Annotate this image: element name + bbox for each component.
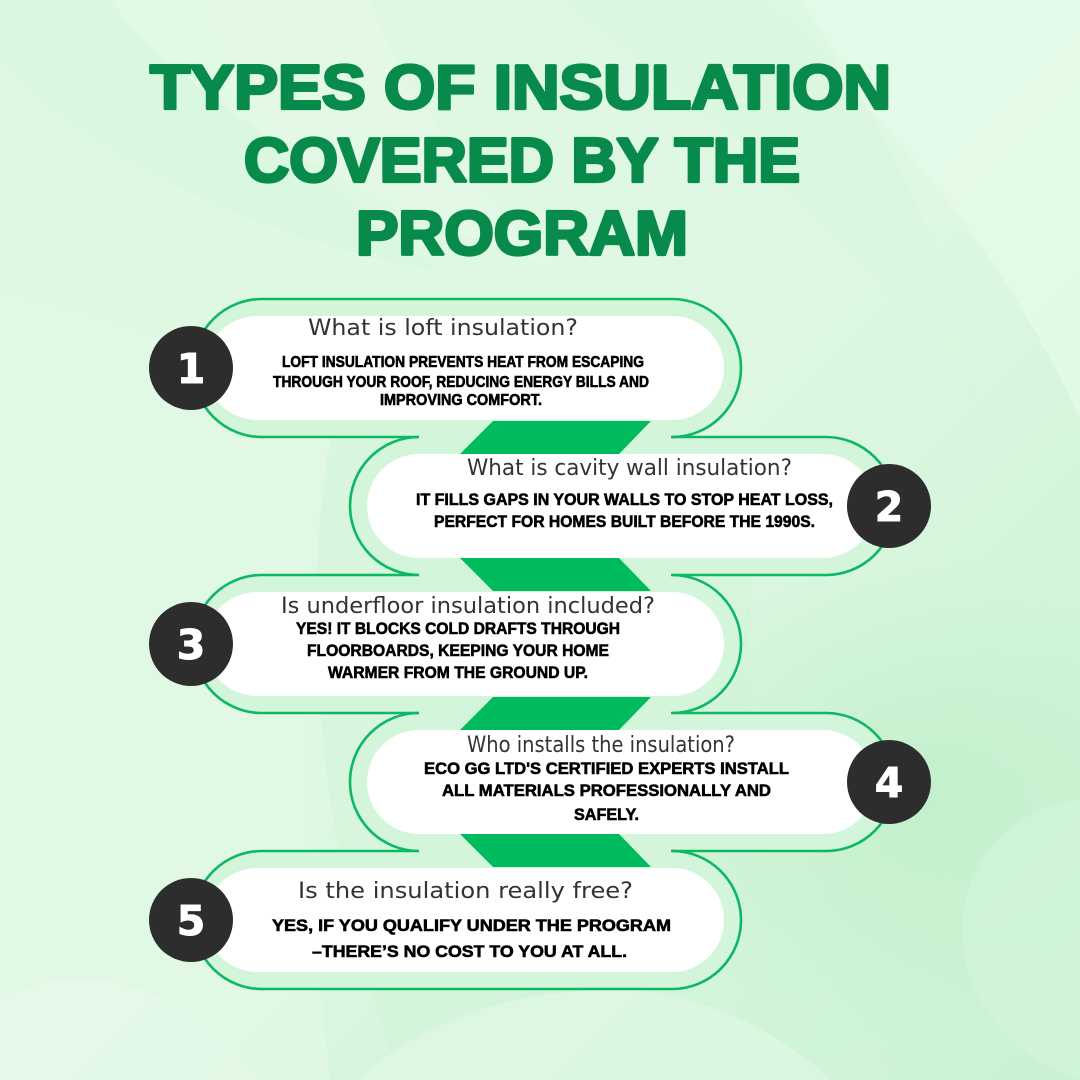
text: step 5 description: –THERE’S NO COST TO YOU AT ALL. <box>312 942 627 961</box>
icon: number 5 badge <box>149 878 233 962</box>
panel: step 2 cavity wall insulation <box>367 454 931 558</box>
icon: number 3 badge <box>149 602 233 686</box>
heading: step 1: What is loft insulation? <box>308 315 578 341</box>
icon: number 3 badge: 3 <box>177 621 205 669</box>
title: TYPES OF INSULATION <box>150 54 891 122</box>
heading: step 5: Is the insulation really free? <box>298 878 633 904</box>
title: COVERED BY THE <box>244 126 800 196</box>
icon: number 2 badge: 2 <box>875 483 903 531</box>
ribbon outline <box>193 299 895 989</box>
green connectors between steps <box>460 421 651 867</box>
text: step 2 description: PERFECT FOR HOMES BUILT BEFORE THE 1990S. <box>434 512 815 531</box>
panel: step 4 who installs <box>367 730 931 834</box>
title <box>150 54 891 268</box>
text: step 4 description <box>424 759 789 824</box>
text: step 5 description <box>272 916 671 961</box>
text: step 1 description <box>273 354 649 409</box>
heading: step 4: Who installs the insulation? <box>467 732 735 758</box>
text: step 5 description: YES, IF YOU QUALIFY UNDER THE PROGRAM <box>272 916 671 935</box>
text: step 3 description: FLOORBOARDS, KEEPING YOUR HOME <box>307 641 609 660</box>
icon: number 1 badge <box>149 326 233 410</box>
text: step 1 description: IMPROVING COMFORT. <box>380 392 542 409</box>
heading: step 3: Is underfloor insulation included? <box>281 593 655 619</box>
text: step 3 description: YES! IT BLOCKS COLD DRAFTS THROUGH <box>296 619 620 638</box>
icon: number 5 badge: 5 <box>177 897 205 945</box>
ribbon backing bands <box>193 299 895 989</box>
text: step 2 description: IT FILLS GAPS IN YOUR WALLS TO STOP HEAT LOSS, <box>416 490 833 509</box>
icon: number 4 badge: 4 <box>875 759 903 807</box>
heading: step 2: What is cavity wall insulation? <box>467 455 792 481</box>
text: step 3 description: WARMER FROM THE GROUND UP. <box>328 663 588 682</box>
text: step 4 description: SAFELY. <box>574 805 639 824</box>
text: step 1 description: LOFT INSULATION PREVENTS HEAT FROM ESCAPING <box>282 354 644 371</box>
icon: number 1 badge: 1 <box>177 345 205 393</box>
text: step 3 description <box>296 619 620 682</box>
icon: number 4 badge <box>847 740 931 824</box>
icon: number 2 badge <box>847 464 931 548</box>
panel: step 1 loft insulation <box>149 315 724 420</box>
title: PROGRAM <box>356 200 688 268</box>
text: step 2 description <box>416 490 833 531</box>
text: step 4 description: ALL MATERIALS PROFESSIONALLY AND <box>442 781 771 800</box>
text: step 1 description: THROUGH YOUR ROOF, REDUCING ENERGY BILLS AND <box>273 374 649 391</box>
panel: step 3 underfloor insulation <box>149 592 724 696</box>
text: step 4 description: ECO GG LTD'S CERTIFIED EXPERTS INSTALL <box>424 759 789 778</box>
panel: step 5 is it free <box>149 868 724 972</box>
